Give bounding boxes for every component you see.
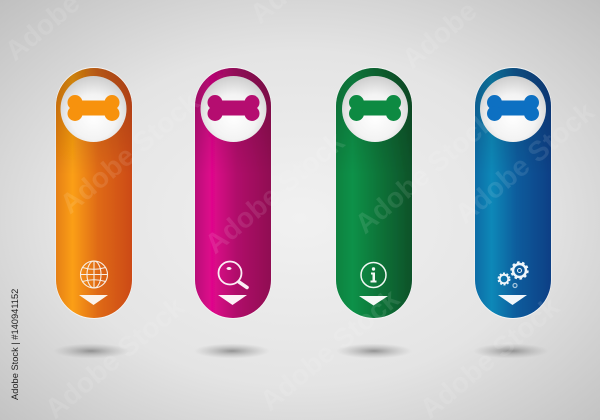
icon: down arrow [79, 295, 108, 305]
icon: magnifier [218, 262, 247, 288]
icon: bone in disc [480, 76, 546, 142]
panel: blue banner [474, 67, 552, 319]
panel: magenta banner [194, 67, 272, 319]
icon: gears [498, 262, 528, 288]
panel: orange banner [56, 67, 132, 319]
watermark: Adobe Stock [349, 106, 500, 240]
icon: down arrow [359, 296, 388, 306]
icon: bone in disc [200, 76, 266, 142]
floor shadow 3 [336, 344, 412, 358]
icon: down arrow [498, 295, 527, 305]
icon: globe [80, 261, 108, 288]
watermark: Adobe Stock [54, 86, 205, 220]
icon: bone in disc [60, 76, 126, 142]
icon: bone in disc [342, 76, 408, 142]
icon: info [361, 262, 386, 288]
floor shadow 2 [194, 344, 270, 358]
watermark: Adobe Stock [254, 283, 405, 417]
floor shadow 1 [53, 344, 129, 358]
stock id label: Adobe Stock | #140941152 [10, 289, 20, 400]
watermark: Adobe Stock [449, 96, 600, 230]
panel: green banner [336, 67, 412, 319]
watermark: Adobe Stock [199, 126, 350, 260]
icon: down arrow [218, 295, 247, 305]
floor shadow 4 [473, 344, 549, 358]
